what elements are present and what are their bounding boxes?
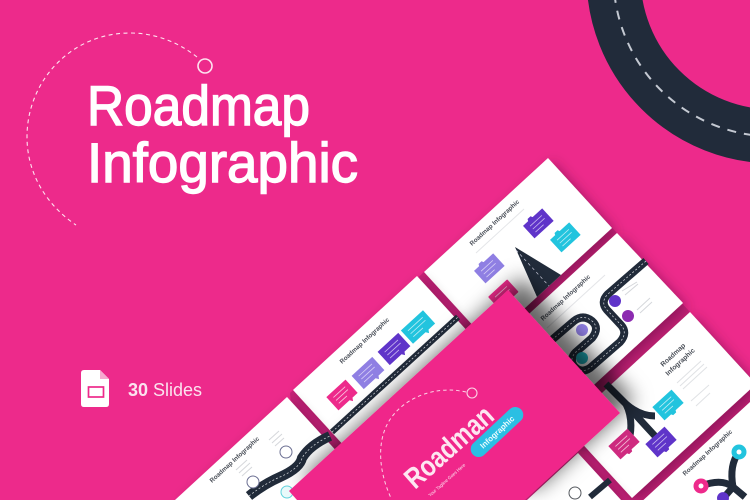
slide title: Infographic	[665, 347, 697, 377]
text lines	[622, 282, 652, 313]
card lavender	[352, 357, 386, 391]
step markers	[576, 295, 634, 364]
title: Infographic	[87, 131, 358, 194]
slide: top centre	[424, 158, 612, 342]
hero pill: Infographic	[478, 414, 517, 451]
card purple	[522, 207, 554, 238]
branching road	[701, 452, 745, 497]
slide: right upper	[493, 233, 683, 417]
slide title: Roadmap	[660, 342, 687, 368]
title rule	[476, 209, 524, 253]
card purple	[378, 333, 412, 367]
title: Roadmap	[87, 74, 310, 137]
card purple	[645, 427, 678, 459]
slide: left middle	[293, 276, 481, 460]
winding road	[540, 261, 646, 371]
slide title: Roadmap Infographic	[540, 273, 592, 322]
slide: right middle	[566, 312, 750, 498]
curved road	[249, 436, 330, 496]
dashed arc with circle	[27, 33, 212, 225]
hero tagline: Your Tagline Goes Here	[427, 462, 467, 498]
icon: slides file	[81, 370, 109, 407]
title	[87, 74, 358, 194]
slide count: 30 Slides	[128, 380, 202, 400]
title rule	[547, 275, 605, 328]
step rings	[247, 446, 293, 498]
slide title: Roadmap Infographic	[339, 316, 391, 365]
road triangle	[515, 247, 561, 297]
slide: bottom centre	[527, 453, 621, 500]
forked road	[606, 384, 655, 436]
card lavender	[473, 252, 505, 283]
straight road	[332, 317, 458, 432]
text lines	[236, 431, 284, 476]
hero dashed arc	[381, 388, 477, 498]
markers	[694, 444, 746, 500]
slide title: Roadmap Infographic	[209, 435, 261, 484]
hero slide	[289, 290, 620, 500]
slide title: Roadmap Infographic	[469, 198, 521, 247]
card cyan	[549, 221, 581, 252]
slide backing bands	[290, 158, 750, 500]
hero pill	[467, 404, 527, 460]
road corner	[614, 0, 750, 136]
text lines	[677, 361, 710, 406]
hero heading: Roadman	[398, 400, 501, 495]
card pink	[326, 380, 360, 413]
slide: right lower	[643, 402, 750, 500]
slide title: Roadmap Infographic	[682, 428, 734, 477]
card cyan	[652, 390, 685, 422]
ring and road	[569, 480, 610, 499]
card cyan	[401, 310, 437, 346]
slide: bottom left	[175, 397, 351, 500]
card magenta	[608, 429, 641, 461]
card pink	[488, 279, 519, 309]
